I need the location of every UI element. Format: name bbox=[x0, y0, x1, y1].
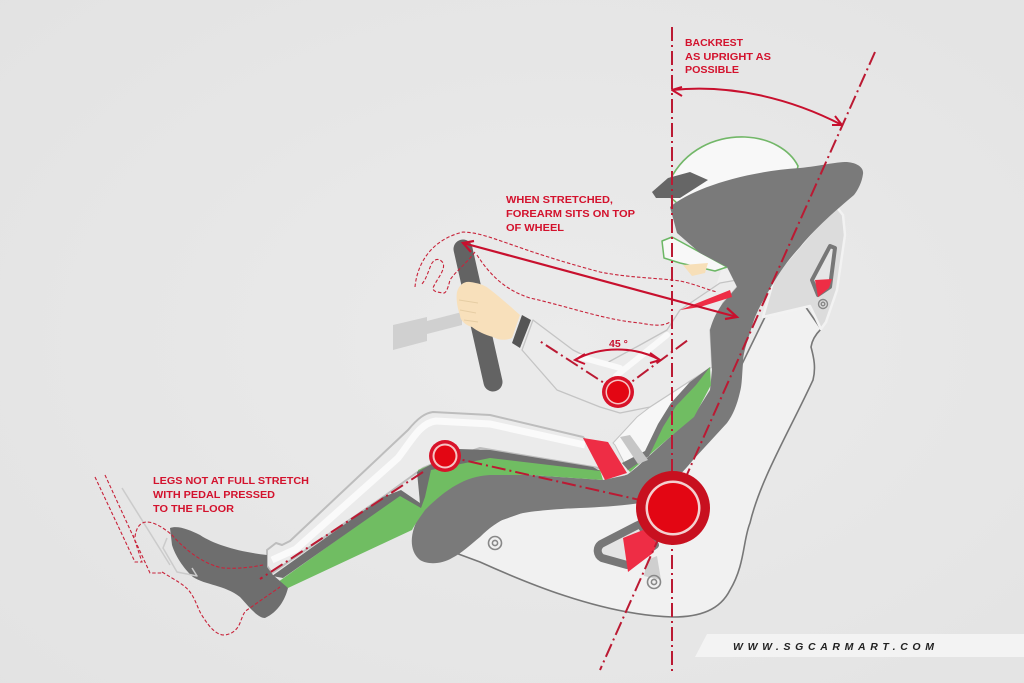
website text: WWW.SGCARMART.COM bbox=[733, 641, 934, 653]
upper arm line bbox=[618, 340, 688, 392]
label: forearm: FOREARM SITS ON TOP bbox=[506, 208, 635, 220]
upper harness slot bbox=[812, 246, 835, 297]
thigh line bbox=[445, 456, 640, 500]
hand bbox=[457, 282, 520, 340]
bolt: lower right bbox=[648, 576, 660, 588]
forearm line bbox=[538, 340, 618, 392]
label: forearm: OF WHEEL bbox=[506, 222, 565, 234]
seat headrest wing bbox=[763, 205, 845, 329]
ghost foot dashed outline bbox=[95, 475, 280, 635]
green suit torso bbox=[622, 367, 711, 472]
finger lines bbox=[459, 300, 478, 322]
neck bbox=[716, 268, 737, 286]
ghost arm dashed outline bbox=[415, 232, 717, 325]
helmet visor bbox=[652, 172, 708, 198]
label: legs: WITH PEDAL PRESSED bbox=[153, 489, 275, 501]
marker: hip joint bbox=[636, 471, 710, 545]
label: legs: TO THE FLOOR bbox=[153, 503, 234, 515]
label: forearm bbox=[506, 194, 635, 234]
bolt: lower left bbox=[488, 536, 502, 550]
label: backrest bbox=[685, 37, 771, 76]
marker: knee joint bbox=[429, 440, 461, 472]
arm and chest suit bbox=[522, 280, 737, 413]
pedal bbox=[122, 488, 197, 576]
label: forearm: WHEN STRETCHED, bbox=[506, 194, 613, 206]
lower leg line bbox=[260, 472, 423, 579]
bolt: upper bbox=[818, 300, 828, 308]
helmet bbox=[652, 137, 798, 215]
label: backrest: POSSIBLE bbox=[685, 64, 739, 76]
arrow: backrest angle bbox=[672, 87, 842, 125]
balaclava and chin bbox=[662, 237, 727, 276]
grey suit side stripe bbox=[622, 367, 710, 470]
label: 45 degrees: 45 ° bbox=[609, 338, 628, 350]
steering wheel bbox=[463, 249, 493, 382]
reference lines bbox=[260, 27, 875, 672]
shoulder belt red bbox=[680, 290, 732, 310]
marker: elbow joint bbox=[602, 376, 634, 408]
steering column bbox=[393, 312, 462, 350]
dark shoe bbox=[170, 527, 288, 618]
lower torso suit bbox=[613, 365, 712, 470]
watermark banner bbox=[695, 634, 1024, 657]
label: backrest: AS UPRIGHT AS bbox=[685, 51, 771, 63]
backrest angle line bbox=[600, 52, 875, 670]
vertical line bbox=[671, 27, 673, 672]
arrow: reach to wheel bbox=[463, 241, 737, 319]
sleeve highlights bbox=[580, 335, 667, 376]
lower harness slot bbox=[598, 524, 661, 580]
grey leg stripe bbox=[272, 449, 600, 578]
white leg of suit bbox=[267, 412, 610, 573]
seat padding bbox=[412, 162, 863, 563]
lower belt red bbox=[623, 530, 657, 572]
glove cuff bbox=[512, 315, 531, 348]
lap belt grey strap bbox=[620, 435, 648, 464]
arrow: 45 degree arm angle bbox=[575, 350, 660, 364]
label: legs bbox=[153, 475, 309, 515]
lap belt red bbox=[583, 438, 627, 480]
green leg of suit bbox=[278, 457, 603, 588]
leg highlight band bbox=[272, 421, 585, 560]
label: backrest: BACKREST bbox=[685, 37, 744, 49]
racing seat shell bbox=[453, 205, 845, 617]
label: legs: LEGS NOT AT FULL STRETCH bbox=[153, 475, 309, 487]
